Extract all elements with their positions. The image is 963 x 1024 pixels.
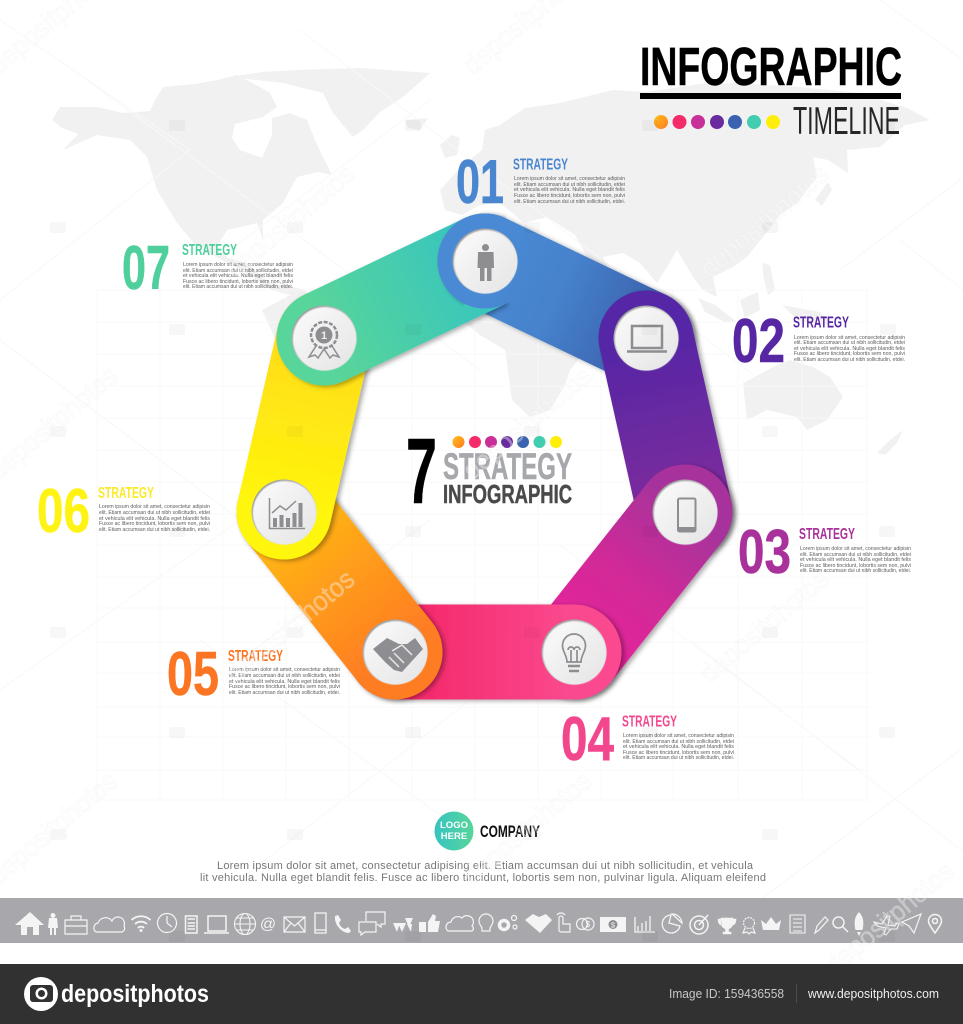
disc 3 [652, 480, 718, 544]
disc 5 [362, 620, 428, 684]
icon: gears [500, 916, 517, 930]
company name: COMPANY [480, 822, 540, 841]
body text 04: Lorem ipsum dolor sit amet, consectetur adipisin [623, 733, 734, 739]
icon: banknote [600, 917, 626, 932]
website: www.depositphotos.com [807, 987, 939, 1001]
body text 04: elit. Etiam accumsan dui ut nibh sollicitudin, etdei [623, 739, 734, 745]
icon: notebook [790, 915, 805, 933]
disc 1 [452, 228, 518, 294]
icon: calculator [186, 916, 197, 933]
body text 04: Fusce ac libero tincidunt, lobortis sem non, pulvi [623, 750, 734, 756]
disc 2 [614, 306, 678, 370]
icon: pencil [815, 917, 828, 933]
heptagon ring of bands [276, 214, 685, 652]
heading strategy 04: STRATEGY [622, 714, 677, 730]
icon: smartphone [678, 498, 696, 532]
body text 01: elit. Etiam accumsan dui ut nibh sollicitudin, etdei. [514, 199, 625, 205]
band 1 blue [485, 261, 646, 338]
body text 03 [800, 546, 911, 574]
icon: handset [335, 915, 351, 933]
icon: award badge [309, 322, 339, 358]
centre dots [452, 436, 562, 448]
icon: laptop [627, 326, 667, 352]
colour dots row [654, 115, 780, 129]
body text 07: Lorem ipsum dolor sit amet, consectetur adipisin [183, 262, 293, 268]
watermark text: depositphotos [457, 766, 597, 890]
body text 04: et vehicula elit vehicula. Nulla eget blandit felis [623, 744, 734, 750]
icon: handshake [525, 914, 552, 933]
heading strategy 03: STRATEGY [799, 526, 855, 543]
step 07 label [122, 234, 293, 303]
step 01 label [456, 148, 625, 217]
band 7 teal [276, 261, 485, 386]
footer logo mark [24, 977, 58, 1011]
body text 06: et vehicula elit vehicula. Nulla eget blandit felis [99, 516, 210, 522]
body text 05 [229, 667, 340, 696]
image id: Image ID: 159436558 [669, 987, 784, 1001]
body text 01: et vehicula elit vehicula. Nulla eget blandit felis [514, 187, 625, 193]
body text 01 [514, 176, 625, 205]
body text 05: et vehicula elit vehicula. Nulla eget blandit felis [229, 679, 340, 685]
icon: briefcase [65, 916, 87, 934]
watermark text: depositphotos [457, 361, 597, 485]
heading strategy 07: STRATEGY [182, 242, 237, 259]
footer brand name: depositphotos [61, 980, 209, 1008]
body text 07: Fusce ac libero tincidunt, lobortis sem non, pulvi [183, 279, 293, 285]
body text 06: elit. Etiam accumsan dui ut nibh sollicitudin, etdei [99, 510, 210, 516]
icon strip [0, 898, 963, 943]
icon: laptop [204, 916, 229, 933]
body text 02: Lorem ipsum dolor sit amet, consectetur adipisin [794, 335, 905, 341]
heading strategy 06: STRATEGY [98, 485, 154, 502]
body text 05: elit. Etiam accumsan dui ut nibh sollicitudin, etdei. [229, 690, 340, 696]
company description: Lorem ipsum dolor sit amet, consectetur adipising elit. Etiam accumsan dui ut nibh sollicitudin, et vehicula [217, 860, 754, 872]
body text 06: elit. Etiam accumsan dui ut nibh sollicitudin, etdei. [99, 527, 210, 533]
icon: chat bubbles [359, 912, 385, 935]
band 2 purple [646, 338, 685, 512]
icon: thumbs up [419, 914, 440, 932]
body text 01: Lorem ipsum dolor sit amet, consectetur adipisin [514, 176, 625, 182]
world map background [52, 68, 930, 455]
blue cap over teal band [438, 212, 510, 308]
body text 02: elit. Etiam accumsan dui ut nibh sollicitudin, etdei. [794, 357, 905, 363]
body text 06: Lorem ipsum dolor sit amet, consectetur adipisin [99, 504, 210, 510]
icon: handshake [373, 638, 423, 672]
body text 02: Fusce ac libero tincidunt, lobortis sem non, pulvi [794, 351, 905, 357]
number 07: 07 [122, 234, 170, 303]
icon: rocket [855, 912, 863, 936]
body text 05: Lorem ipsum dolor sit amet, consectetur adipisin [229, 667, 340, 673]
body text 03: elit. Etiam accumsan dui ut nibh sollicitudin, etdei. [800, 568, 911, 574]
watermark text: depositphotos [819, 856, 959, 980]
icon: at sign: @ [260, 916, 276, 933]
title underline [640, 93, 901, 99]
icon: bulb [479, 914, 493, 931]
icon: brain cloud [446, 916, 473, 931]
company block [200, 812, 766, 884]
body text 04: elit. Etiam accumsan dui ut nibh sollicitudin, etdei. [623, 755, 734, 761]
icon: medal [743, 918, 755, 934]
watermark text: depositphotos [220, 564, 360, 688]
icon: globe [234, 914, 256, 934]
body text 06 [99, 504, 210, 533]
title block [640, 37, 902, 143]
icon: light bulb [562, 634, 586, 671]
body text 07: elit. Etiam accumsan dui ut nibh sollicitudin, etdei. [183, 284, 293, 290]
icon: target [690, 915, 708, 934]
number 05: 05 [167, 640, 219, 709]
company description: lit vehicula. Nulla eget blandit felis. Fusce ac libero tincidunt, lobortis sem non, pulvinar ligula. Aliquam eleifend [200, 872, 766, 884]
node discs [252, 228, 718, 684]
disc 6 [252, 480, 316, 544]
step 06 label [37, 477, 210, 546]
disc 7 [292, 306, 356, 370]
footer divider [796, 984, 797, 1003]
icon: magnifier [833, 917, 848, 932]
icon: map pin [928, 914, 942, 933]
icon: pie chart [662, 914, 682, 933]
icon: banknote: $ [611, 920, 616, 930]
icon: person [478, 244, 494, 281]
body text 03: Lorem ipsum dolor sit amet, consectetur adipisin [800, 546, 911, 552]
step 03 label [738, 518, 911, 587]
icon: growth chart [270, 498, 305, 528]
icon: wifi [132, 916, 150, 932]
step 02 label [732, 307, 905, 376]
icon: clouds [94, 917, 125, 932]
body text 04 [623, 733, 734, 761]
icon: home [15, 912, 44, 935]
logo badge [434, 812, 474, 850]
body text 03: et vehicula elit vehicula. Nulla eget blandit felis [800, 557, 911, 563]
icon: person [48, 913, 58, 935]
heading strategy 01: STRATEGY [513, 156, 568, 174]
body text 01: elit. Etiam accumsan dui ut nibh sollicitudin, etdei [514, 182, 625, 188]
heading strategy 02: STRATEGY [793, 314, 849, 332]
body text 01: Fusce ac libero tincidunt, lobortis sem non, pulvi [514, 193, 625, 199]
heading strategy 05: STRATEGY [228, 648, 283, 665]
watermark text: depositphotos [694, 564, 834, 688]
centre word STRATEGY: STRATEGY [443, 446, 572, 487]
body text 05: elit. Etiam accumsan dui ut nibh sollicitudin, etdei [229, 673, 340, 679]
strip background [0, 898, 963, 943]
icon: clock [158, 914, 177, 933]
body text 05: Fusce ac libero tincidunt, lobortis sem non, pulvi [229, 684, 340, 690]
body text 02 [794, 335, 905, 363]
icon: touch gesture [557, 913, 570, 932]
disc 4 [542, 620, 606, 684]
step 04 label [561, 705, 734, 774]
body text 07: et vehicula elit vehicula. Nulla eget blandit felis [183, 273, 293, 279]
footer background [0, 964, 963, 1024]
band 5 orange [284, 512, 395, 652]
band 4 pink [395, 604, 574, 700]
number 03: 03 [738, 518, 791, 587]
company description [200, 860, 766, 884]
icon: airplane [874, 916, 899, 935]
band 6 yellow [284, 338, 324, 512]
number 01: 01 [456, 148, 504, 217]
logo badge: LOGO [440, 820, 468, 831]
icon: award badge: 1 [321, 330, 327, 342]
body text 02: et vehicula elit vehicula. Nulla eget blandit felis [794, 346, 905, 352]
number 04: 04 [561, 705, 614, 774]
icon: crown [761, 917, 781, 930]
body text 03: elit. Etiam accumsan dui ut nibh sollicitudin, etdei [800, 552, 911, 558]
icon: smartphone [315, 913, 326, 933]
body text 03: Fusce ac libero tincidunt, lobortis sem non, pulvi [800, 563, 911, 569]
icon: coins [576, 918, 594, 930]
body text 02: elit. Etiam accumsan dui ut nibh sollicitudin, etdei [794, 340, 905, 346]
logo badge: HERE [441, 831, 467, 842]
number 02: 02 [732, 307, 785, 376]
body text 07: elit. Etiam accumsan dui ut nibh sollicitudin, etdei [183, 268, 293, 274]
step 05 label [167, 640, 340, 709]
centre word INFOGRAPHIC: INFOGRAPHIC [443, 479, 572, 509]
watermark camera marks [50, 120, 896, 942]
icon: paper plane [902, 914, 921, 933]
icon: trophy [718, 918, 736, 934]
band 3 magenta [574, 512, 685, 652]
centre headline [406, 419, 572, 523]
watermark text: depositphotos [694, 159, 834, 283]
big number 7: 7 [406, 419, 437, 523]
body text 06: Fusce ac libero tincidunt, lobortis sem non, pulvi [99, 521, 210, 527]
icon: bar chart [635, 916, 655, 932]
icon: envelope [284, 917, 305, 932]
watermark text: depositphotos [220, 159, 360, 283]
icon: people [393, 918, 413, 932]
body text 07 [183, 262, 293, 290]
footer bar [0, 964, 963, 1024]
icon: coins: $ [586, 920, 591, 929]
number 06: 06 [37, 477, 90, 546]
